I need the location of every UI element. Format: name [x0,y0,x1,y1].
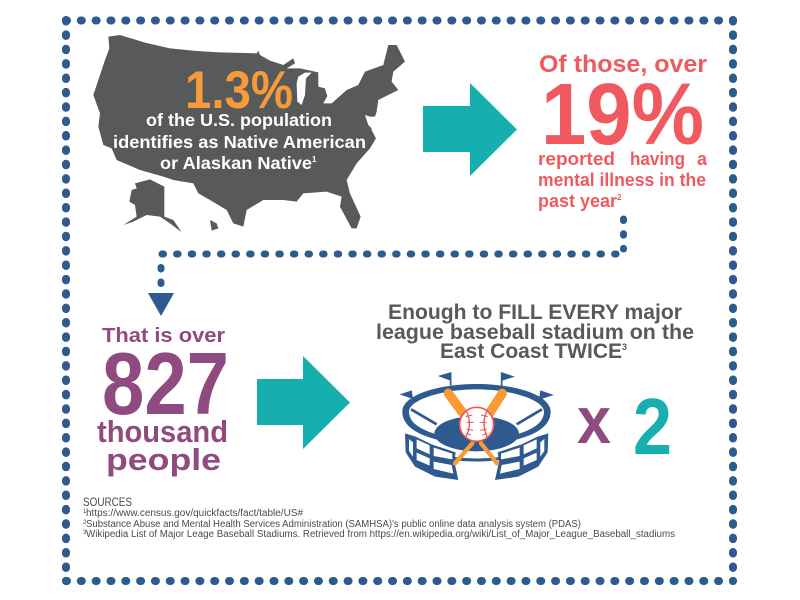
statistic: 19%: 19% [541,66,704,163]
stadium rim [402,384,551,440]
panel: US map statistic [93,35,405,232]
description: population share: or Alaskan Native [160,153,312,173]
flags [400,372,553,402]
text block: sources: Substance Abuse and Mental Health Services Administration (SAMHSA)'s public online data analysis system (PDAS) [86,519,581,530]
multiplier: x 2 [577,382,672,471]
text block: sources: SOURCES [83,495,132,509]
left stands [405,433,458,480]
multiplier: x 2: x [577,383,611,457]
panel: 827 thousand people [97,325,229,477]
description: mental illness: past year [538,191,617,211]
field [434,416,519,451]
heading: enough to fill every stadium: Enough to FILL EVERY major [388,301,682,324]
heading: enough to fill every stadium: East Coast TWICE [440,340,622,363]
bats [448,393,502,463]
dotted connector arrow [148,219,624,316]
text block: sources: 1 [83,509,87,515]
multiplier: x 2: 2 [633,382,672,471]
arrow: top teal [423,83,517,176]
heading: enough to fill every stadium: 3 [622,342,627,352]
statistic: 827: 827 [102,334,229,433]
icon: US map [93,35,405,232]
description: population share: 1 [312,155,317,164]
description: mental illness [538,149,708,211]
stand windows [409,439,544,474]
description: population share: of the U.S. population [146,110,332,130]
heading: of those: Of those, over [539,51,707,78]
description: mental illness: reported [538,149,615,169]
description: mental illness: 2 [617,193,622,202]
lower ring [434,455,519,460]
statistic: 1.3%: 1.3% [185,61,293,120]
icon: baseball stadium [400,372,553,480]
description: population share [113,110,366,173]
right stands [495,433,548,480]
spokes [411,409,542,424]
arrow: bottom teal [257,356,350,449]
panel: mental illness statistic [538,51,708,211]
description: mental illness: mental illness in the [538,170,706,190]
label: thousand people: thousand [97,414,228,449]
description: population share: identifies as Native American [113,132,366,152]
panel: 827 thousand people: people [106,442,221,477]
description: mental illness: having [630,149,685,169]
baseball [460,407,494,441]
description: mental illness: a [697,149,708,169]
text block: sources: Wikipedia List of Major Leage Baseball Stadiums. Retrieved from https://en.wikipedia.org/wiki/List_of_Major_League_Baseball_stadiums [86,529,675,540]
heading: enough to fill every stadium [376,301,694,363]
text block: sources [83,495,675,540]
heading: enough to fill every stadium: league baseball stadium on the [376,321,694,344]
heading: that is over: That is over [102,325,225,347]
text block: sources: 2 [83,520,87,526]
text block: sources: https://www.census.gov/quickfacts/fact/table/US# [86,508,303,519]
text block: sources: 3 [83,530,87,536]
dotted page border [66,20,733,581]
